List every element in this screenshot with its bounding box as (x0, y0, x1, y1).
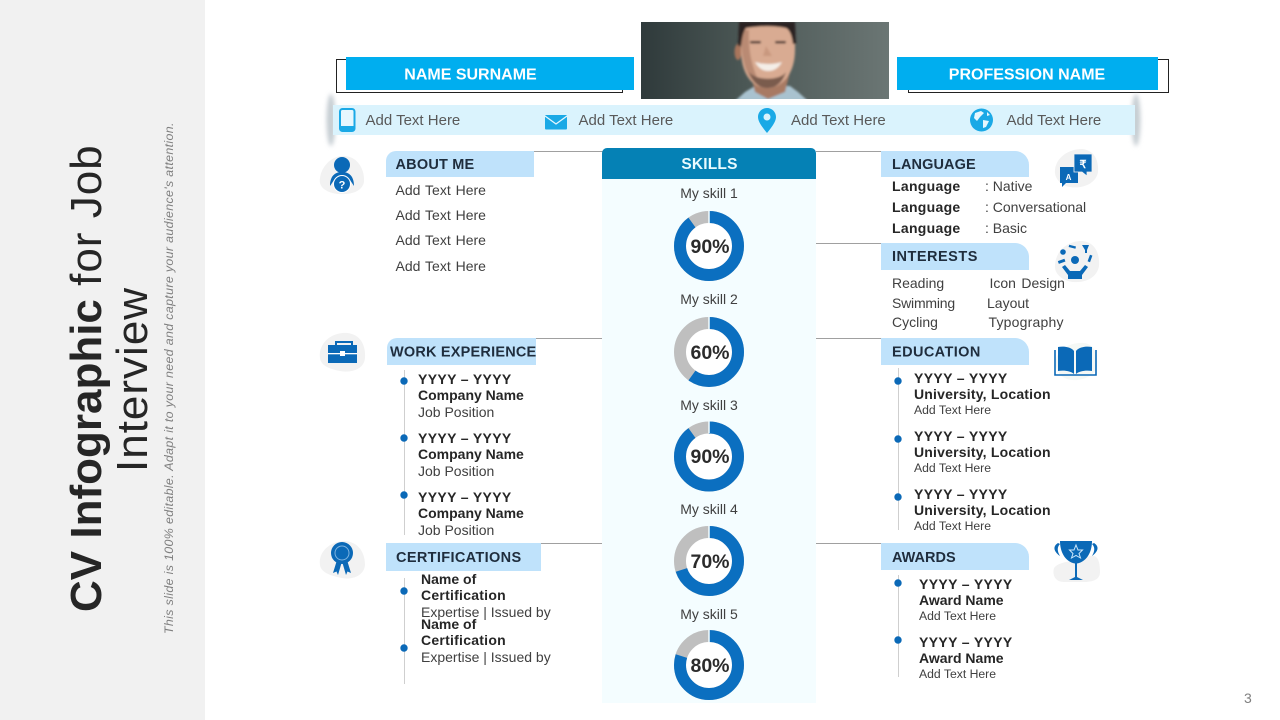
skill 2 donut: 60% (690, 342, 730, 364)
name banner: NAME SURNAME (404, 66, 537, 84)
language heading: LANGUAGE (892, 157, 976, 173)
education timeline: University, Location (914, 444, 1051, 460)
subtitle: This slide is 100% editable. Adapt it to your need and capture your audience's attention. (162, 122, 176, 634)
certifications timeline: Name of (421, 571, 477, 587)
icon: mail (545, 115, 567, 130)
awards timeline: Add Text Here (919, 609, 996, 623)
skill 3 donut (680, 397, 738, 486)
work timeline: Company Name (418, 446, 524, 462)
about me heading: ABOUT ME (396, 157, 475, 173)
awards timeline (894, 575, 1013, 681)
skills heading (602, 148, 816, 179)
about me text: Add Text Here (396, 207, 486, 223)
contact text 3: Add Text Here (791, 112, 886, 129)
work timeline: Company Name (418, 505, 524, 521)
education timeline: University, Location (914, 386, 1051, 402)
language heading (881, 151, 1029, 177)
education timeline: University, Location (914, 502, 1051, 518)
skill 3 donut: My skill 3 (680, 397, 738, 413)
work experience heading (387, 338, 537, 365)
skill 5 donut: 80% (690, 655, 730, 677)
contact strip (326, 94, 1140, 146)
icon: globe (970, 108, 993, 132)
skill 2 donut (680, 291, 738, 381)
interests list: Icon Design (990, 275, 1065, 291)
profession banner (897, 57, 1168, 92)
certifications timeline (400, 571, 551, 684)
title: CV Infographic for Job (62, 144, 111, 612)
contact text 1: Add Text Here (366, 112, 460, 129)
certifications timeline: Certification (421, 587, 506, 603)
icon: speech bubbles: ₹ (1080, 159, 1086, 171)
connector lines (534, 152, 881, 544)
education timeline (894, 368, 1051, 533)
skills heading: SKILLS (681, 156, 738, 173)
panel: language (881, 149, 1098, 236)
panel: awards (881, 541, 1100, 681)
certifications timeline: Expertise | Issued by (421, 649, 551, 665)
certifications heading (386, 543, 541, 571)
skill 1 donut (680, 185, 738, 275)
icon: person with question mark (320, 156, 364, 194)
interests list: Typography (988, 314, 1064, 330)
panel: interests (881, 241, 1099, 330)
work timeline: Job Position (418, 522, 494, 538)
icon: speech bubbles: A (1066, 173, 1072, 182)
work timeline: Job Position (418, 404, 494, 420)
title: Interview (108, 287, 157, 472)
education heading: EDUCATION (892, 344, 981, 360)
education timeline: YYYY – YYYY (914, 428, 1008, 444)
interests heading (881, 243, 1029, 270)
about me text: Add Text Here (396, 182, 486, 198)
language list: : Native (985, 178, 1033, 194)
panel: work experience (320, 333, 537, 538)
certifications timeline: Certification (421, 632, 506, 648)
education timeline: YYYY – YYYY (914, 486, 1008, 502)
education timeline: Add Text Here (914, 519, 991, 533)
awards heading: AWARDS (892, 550, 956, 566)
work timeline (400, 370, 524, 538)
certifications heading: CERTIFICATIONS (396, 550, 521, 566)
certifications timeline: Expertise | Issued by (421, 604, 551, 620)
awards timeline: Add Text Here (919, 667, 996, 681)
interests list: Reading (892, 275, 944, 291)
skill 4 donut: 70% (690, 551, 730, 573)
language list: Language (892, 220, 961, 236)
portrait photo (641, 22, 889, 101)
awards heading (881, 543, 1029, 570)
skill 5 donut (680, 606, 738, 694)
interests list: Swimming (892, 295, 955, 311)
language list: : Basic (985, 220, 1027, 236)
about me text (396, 182, 486, 274)
education timeline: YYYY – YYYY (914, 370, 1008, 386)
work timeline: Job Position (418, 463, 494, 479)
panel: education (881, 338, 1097, 533)
education timeline: Add Text Here (914, 461, 991, 475)
about me heading (386, 151, 534, 177)
icon: speech bubbles (1055, 149, 1098, 187)
language list (892, 178, 1086, 236)
sidebar panel (0, 0, 205, 720)
interests heading: INTERESTS (892, 249, 978, 265)
title (62, 144, 157, 612)
icon: person with question mark: ? (339, 180, 346, 192)
icon: briefcase (320, 333, 365, 372)
work timeline: Company Name (418, 387, 524, 403)
about me text: Add Text Here (396, 232, 486, 248)
skill 4 donut (680, 501, 738, 590)
education heading (881, 338, 1029, 365)
certifications timeline: Name of (421, 616, 477, 632)
skill 3 donut: 90% (690, 446, 730, 468)
panel: certifications (320, 541, 551, 684)
icon: phone (340, 109, 354, 131)
contact text 4: Add Text Here (1006, 112, 1101, 129)
education timeline: Add Text Here (914, 403, 991, 417)
language list: : Conversational (985, 199, 1086, 215)
skill 1 donut: My skill 1 (680, 185, 738, 201)
awards timeline: Award Name (919, 592, 1004, 608)
icon: location pin (758, 108, 776, 133)
work experience heading: WORK EXPERIENCE (390, 344, 537, 360)
page number: 3 (1244, 690, 1252, 706)
awards timeline: Award Name (919, 650, 1004, 666)
contact text 2: Add Text Here (578, 112, 673, 129)
skill 5 donut: My skill 5 (680, 606, 738, 622)
panel: about me (320, 151, 534, 274)
panel: skills (602, 148, 816, 703)
profession banner: PROFESSION NAME (949, 66, 1106, 84)
work timeline: YYYY – YYYY (418, 430, 512, 446)
work timeline: YYYY – YYYY (418, 489, 512, 505)
name banner (336, 57, 634, 92)
skill 2 donut: My skill 2 (680, 291, 738, 307)
icon: trophy (1053, 541, 1100, 582)
about me text: Add Text Here (396, 258, 486, 274)
language list: Language (892, 178, 961, 194)
awards timeline: YYYY – YYYY (919, 576, 1013, 592)
icon: juggling person (1055, 241, 1099, 282)
interests list: Cycling (892, 314, 938, 330)
skill 4 donut: My skill 4 (680, 501, 738, 517)
work timeline: YYYY – YYYY (418, 371, 512, 387)
language list: Language (892, 199, 961, 215)
icon: ribbon (320, 541, 365, 578)
icon: open book (1055, 343, 1097, 380)
skill 1 donut: 90% (690, 236, 730, 258)
interests list (892, 275, 1065, 330)
interests list: Layout (987, 295, 1029, 311)
awards timeline: YYYY – YYYY (919, 634, 1013, 650)
